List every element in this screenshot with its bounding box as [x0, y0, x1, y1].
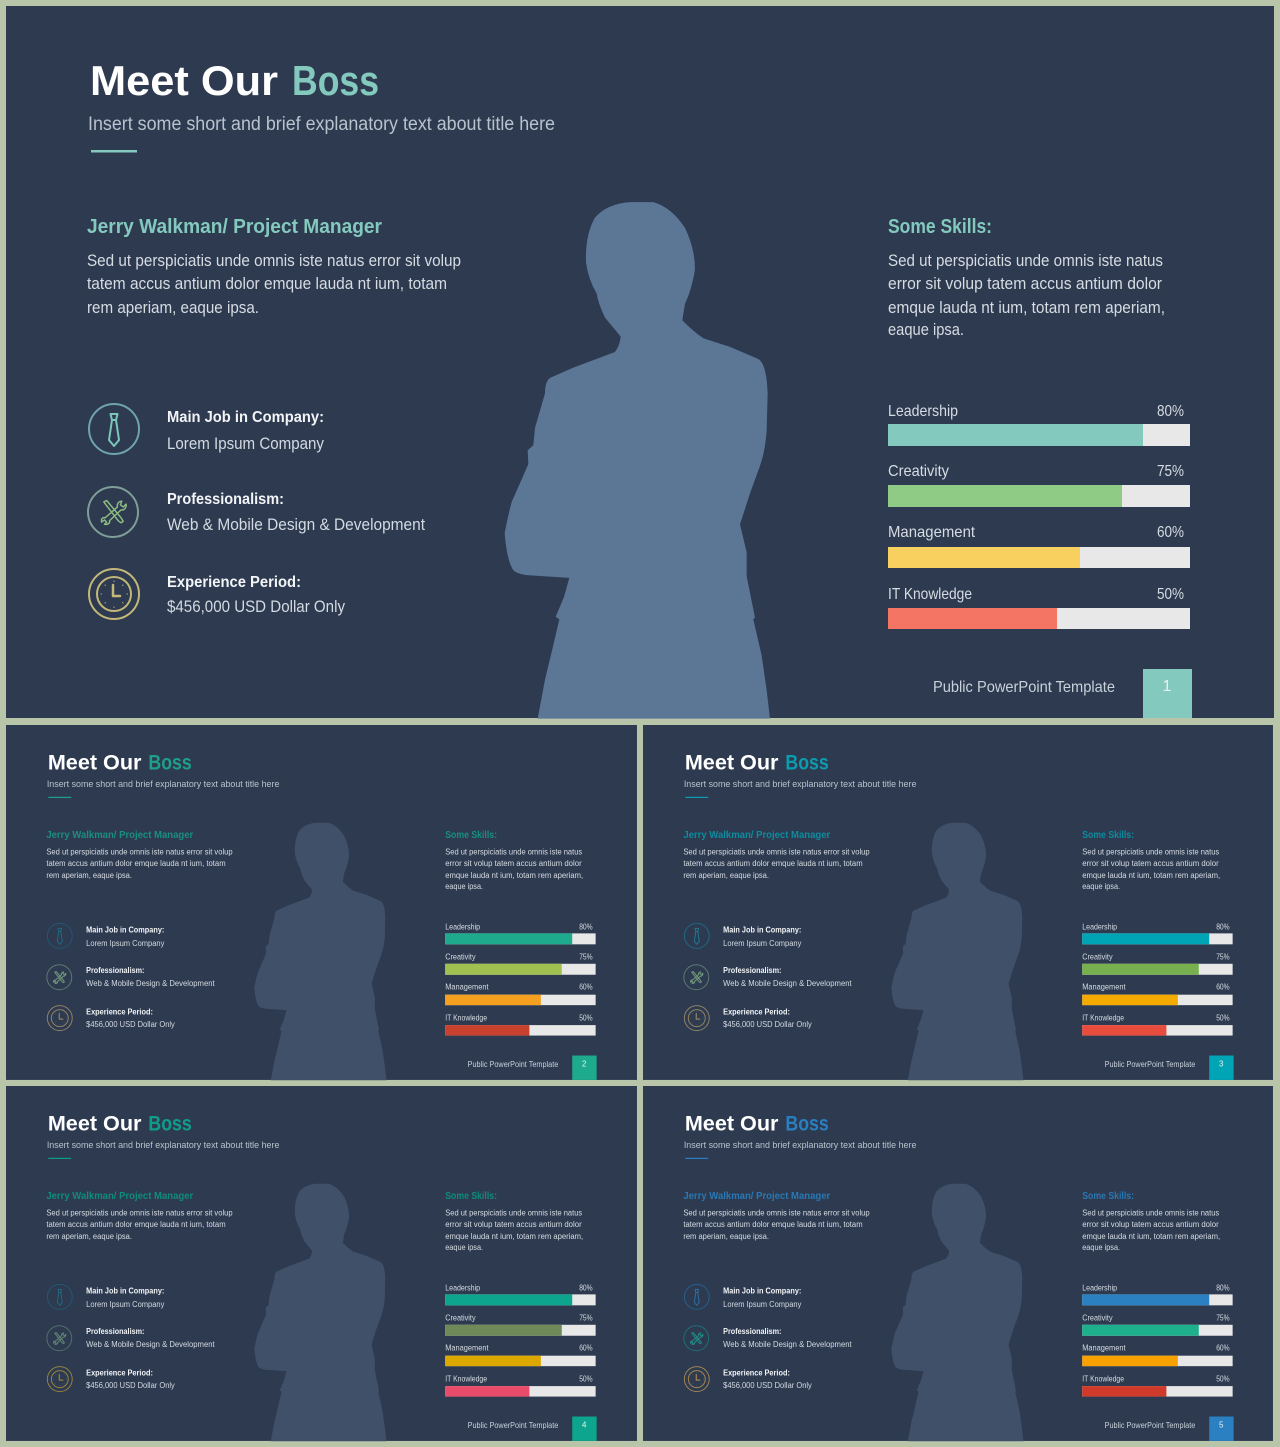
slide 1 professionalism text: Web & Mobile Design & Development	[167, 516, 425, 534]
slide 3 subtitle: Insert some short and brief explanatory text about title here	[684, 779, 916, 790]
slide 1 title underline	[91, 150, 137, 152]
slide 1 bar chart: skills: 50%	[1157, 586, 1184, 603]
slide 1 description: Sed ut perspiciatis unde omnis iste natus error sit volup	[87, 252, 461, 270]
slide 1 description: rem aperiam, eaque ipsa.	[87, 299, 259, 317]
slide 5 job text	[723, 1286, 802, 1309]
slide 1 page number	[1143, 669, 1192, 718]
slide 4 silhouette	[254, 1184, 386, 1441]
slide 5 name heading: Jerry Walkman/ Project Manager	[683, 1191, 830, 1202]
panel: slide 2	[6, 725, 637, 1080]
slide 1 job text: Main Job in Company:	[167, 409, 324, 426]
slide 4 skills description: emque lauda nt ium, totam rem aperiam,	[445, 1232, 583, 1241]
slide 4 title: Boss	[148, 1112, 192, 1135]
slide 2 bar chart: skills	[445, 922, 596, 1036]
slide 5 bar chart: skills: 75%	[1216, 1313, 1230, 1322]
slide 4 experience text: Experience Period:	[86, 1369, 153, 1378]
slide 5 icon: tools	[684, 1326, 709, 1351]
slide 2 description	[46, 848, 233, 880]
slide 2 skills description	[445, 848, 583, 891]
slide 5 title	[685, 1112, 829, 1135]
slide 2 skills description: Sed ut perspiciatis unde omnis iste natus	[445, 848, 582, 857]
slide 4 bar chart: skills	[445, 1283, 596, 1397]
slide 1 skills heading: Some Skills:	[888, 216, 992, 238]
slide 4 bar chart: skills: 80%	[579, 1283, 593, 1292]
slide 4 page number	[572, 1417, 597, 1441]
slide 4 footer text: Public PowerPoint Template	[468, 1421, 559, 1430]
slide 3 skills description: eaque ipsa.	[1082, 882, 1120, 891]
slide 4 icon: clock	[47, 1367, 72, 1392]
slide 2 description: tatem accus antium dolor emque lauda nt ium, totam	[46, 859, 226, 868]
slide 4 professionalism text: Web & Mobile Design & Development	[86, 1340, 215, 1349]
slide 4 title: Meet Our	[48, 1112, 141, 1135]
slide 3 background	[643, 725, 1273, 1080]
slide 3 silhouette	[891, 823, 1023, 1080]
slide 2 experience text: Experience Period:	[86, 1008, 153, 1017]
slide 3 title underline	[685, 797, 708, 798]
slide 5 bar chart: skills	[1082, 1283, 1233, 1397]
slide 3 page number	[1209, 1056, 1234, 1080]
slide 2 bar chart: skills: IT Knowledge	[445, 1014, 488, 1023]
panel: slide 3	[643, 725, 1273, 1080]
slide 3 bar chart: skills: 75%	[1216, 952, 1230, 961]
slide 4 job text: Main Job in Company:	[86, 1286, 164, 1295]
slide 4 description: Sed ut perspiciatis unde omnis iste natus error sit volup	[46, 1209, 233, 1218]
slide 5 experience text	[723, 1369, 813, 1390]
slide 2 title: Boss	[148, 751, 192, 774]
slide 3 bar chart: skills: 60%	[1216, 983, 1230, 992]
slide 1 bar chart: skills	[888, 403, 1190, 629]
slide 1 skills description	[888, 252, 1165, 339]
slide 4 icon: tools	[47, 1326, 72, 1351]
slide 3 name heading: Jerry Walkman/ Project Manager	[683, 830, 830, 841]
slide 1 job text: Lorem Ipsum Company	[167, 435, 325, 453]
slide 5 icon: clock	[684, 1367, 709, 1392]
slide 5 professionalism text: Web & Mobile Design & Development	[723, 1340, 852, 1349]
slide 5 title underline	[685, 1158, 708, 1159]
slide 1 skills description: error sit volup tatem accus antium dolor	[888, 275, 1162, 293]
slide 4 bar chart: skills: 75%	[579, 1313, 593, 1322]
panel: slide 5	[643, 1086, 1273, 1441]
slide 1 bar chart: skills: IT Knowledge	[888, 586, 972, 603]
slide 2 background	[6, 725, 637, 1080]
slide 5 bar chart: skills: Creativity	[1082, 1313, 1113, 1322]
slide 3 icon: clock	[684, 1006, 709, 1031]
slide 5 bar chart: skills: Management	[1082, 1344, 1126, 1353]
slide 2 footer text: Public PowerPoint Template	[468, 1060, 559, 1069]
slide 4 icon: tie	[47, 1284, 72, 1309]
slide 5 title: Meet Our	[685, 1112, 778, 1135]
slide 3 title	[685, 751, 829, 774]
slide 3 title: Meet Our	[685, 751, 778, 774]
slide 2 bar chart: skills: 80%	[579, 922, 593, 931]
slide 3 experience text	[723, 1008, 813, 1029]
slide 4 name heading: Jerry Walkman/ Project Manager	[46, 1191, 193, 1202]
slide 3 bar chart: skills: Creativity	[1082, 952, 1113, 961]
slide 2 professionalism text: Professionalism:	[86, 966, 144, 975]
slide 1 title: Boss	[292, 57, 379, 104]
slide 1 description	[87, 252, 461, 317]
slide 3 description: Sed ut perspiciatis unde omnis iste natus error sit volup	[683, 848, 870, 857]
slide 4 bar chart: skills: 50%	[579, 1375, 593, 1384]
slide 3 skills description: error sit volup tatem accus antium dolor	[1082, 859, 1219, 868]
slide 5 skills description: Sed ut perspiciatis unde omnis iste natus	[1082, 1209, 1219, 1218]
slide 2 description: rem aperiam, eaque ipsa.	[46, 871, 132, 880]
slide 1 footer text: Public PowerPoint Template	[933, 679, 1115, 696]
slide 2 name heading: Jerry Walkman/ Project Manager	[46, 830, 193, 841]
slide 5 description: Sed ut perspiciatis unde omnis iste natus error sit volup	[683, 1209, 870, 1218]
slide 2 bar chart: skills: 50%	[579, 1014, 593, 1023]
slide 2 page number: 2	[582, 1059, 587, 1068]
slide 5 skills description: emque lauda nt ium, totam rem aperiam,	[1082, 1232, 1220, 1241]
panel: slide 4	[6, 1086, 637, 1441]
slide 5 skills description: eaque ipsa.	[1082, 1243, 1120, 1252]
slide 5 skills description: error sit volup tatem accus antium dolor	[1082, 1220, 1219, 1229]
slide 2 job text: Main Job in Company:	[86, 925, 164, 934]
slide 1 name heading: Jerry Walkman/ Project Manager	[87, 216, 382, 238]
slide 4 description	[46, 1209, 233, 1241]
slide 1 icon: clock	[89, 569, 139, 619]
slide 5 professionalism text	[723, 1327, 852, 1349]
slide 5 description	[683, 1209, 870, 1241]
slide 3 job text: Lorem Ipsum Company	[723, 939, 802, 948]
slide 4 professionalism text	[86, 1327, 215, 1349]
slide 4 skills description: Sed ut perspiciatis unde omnis iste natus	[445, 1209, 582, 1218]
slide 3 experience text: $456,000 USD Dollar Only	[723, 1020, 813, 1029]
slide 2 bar chart: skills: Management	[445, 983, 489, 992]
slide 3 bar chart: skills: Management	[1082, 983, 1126, 992]
slide 3 icon: tie	[684, 923, 709, 948]
slide 3 professionalism text: Professionalism:	[723, 966, 781, 975]
slide 3 description: rem aperiam, eaque ipsa.	[683, 871, 769, 880]
slide 1 background	[6, 6, 1274, 718]
slide 1 bar chart: skills: 75%	[1157, 463, 1184, 480]
slide 1 skills description: emque lauda nt ium, totam rem aperiam,	[888, 299, 1165, 317]
slide 1 bar chart: skills: Management	[888, 524, 976, 541]
slide 3 skills description: Sed ut perspiciatis unde omnis iste natus	[1082, 848, 1219, 857]
slide 4 skills description: error sit volup tatem accus antium dolor	[445, 1220, 582, 1229]
slide 4 background	[6, 1086, 637, 1441]
slide 2 description: Sed ut perspiciatis unde omnis iste natus error sit volup	[46, 848, 233, 857]
slide 3 description	[683, 848, 870, 880]
slide 4 description: rem aperiam, eaque ipsa.	[46, 1232, 132, 1241]
slide 3 bar chart: skills: 50%	[1216, 1014, 1230, 1023]
slide 5 bar chart: skills: 60%	[1216, 1344, 1230, 1353]
slide 5 professionalism text: Professionalism:	[723, 1327, 781, 1336]
slide 2 job text	[86, 925, 165, 948]
slide 2 title	[48, 751, 192, 774]
slide 2 subtitle: Insert some short and brief explanatory text about title here	[47, 779, 279, 790]
slide 1 title	[90, 57, 379, 104]
slide 3 footer text: Public PowerPoint Template	[1105, 1060, 1196, 1069]
slide 4 description: tatem accus antium dolor emque lauda nt ium, totam	[46, 1220, 226, 1229]
slide 1 icon: tools	[88, 487, 138, 537]
slide 4 bar chart: skills: 60%	[579, 1344, 593, 1353]
slide 5 subtitle: Insert some short and brief explanatory text about title here	[684, 1140, 916, 1151]
slide 3 professionalism text: Web & Mobile Design & Development	[723, 979, 852, 988]
slide 5 bar chart: skills: 50%	[1216, 1375, 1230, 1384]
slide 5 silhouette	[891, 1184, 1023, 1441]
slide 1 professionalism text: Professionalism:	[167, 491, 284, 508]
slide 4 experience text: $456,000 USD Dollar Only	[86, 1381, 176, 1390]
slide 4 page number: 4	[582, 1420, 587, 1429]
slide 4 skills heading: Some Skills:	[445, 1191, 497, 1202]
slide 5 job text: Lorem Ipsum Company	[723, 1300, 802, 1309]
slide 3 bar chart: skills	[1082, 922, 1233, 1036]
slide 4 job text	[86, 1286, 165, 1309]
slide 2 bar chart: skills: 75%	[579, 952, 593, 961]
slide 2 job text: Lorem Ipsum Company	[86, 939, 165, 948]
slide 2 professionalism text: Web & Mobile Design & Development	[86, 979, 215, 988]
slide 1 skills description: eaque ipsa.	[888, 321, 964, 339]
slide 5 experience text: Experience Period:	[723, 1369, 790, 1378]
slide 3 skills heading: Some Skills:	[1082, 830, 1134, 841]
slide 1 description: tatem accus antium dolor emque lauda nt ium, totam	[87, 275, 447, 293]
slide 3 experience text: Experience Period:	[723, 1008, 790, 1017]
slide 5 page number	[1209, 1417, 1234, 1441]
slide 5 description: rem aperiam, eaque ipsa.	[683, 1232, 769, 1241]
slide 5 title: Boss	[785, 1112, 829, 1135]
slide 3 job text	[723, 925, 802, 948]
slide 3 page number: 3	[1219, 1059, 1224, 1068]
slide 5 footer text: Public PowerPoint Template	[1105, 1421, 1196, 1430]
slide 4 experience text	[86, 1369, 176, 1390]
slide 1 title: Meet Our	[90, 57, 278, 104]
slide 2 skills description: emque lauda nt ium, totam rem aperiam,	[445, 871, 583, 880]
slide 2 bar chart: skills: Leadership	[445, 922, 481, 931]
slide 4 bar chart: skills: Leadership	[445, 1283, 481, 1292]
slide 4 bar chart: skills: Creativity	[445, 1313, 476, 1322]
slide 5 background	[643, 1086, 1273, 1441]
slide 1 skills description: Sed ut perspiciatis unde omnis iste natus	[888, 252, 1163, 270]
slide 5 icon: tie	[684, 1284, 709, 1309]
slide 4 professionalism text: Professionalism:	[86, 1327, 144, 1336]
slide 3 bar chart: skills: Leadership	[1082, 922, 1118, 931]
slide 1 bar chart: skills: Creativity	[888, 463, 949, 480]
slide 3 skills description	[1082, 848, 1220, 891]
slide 3 title: Boss	[785, 751, 829, 774]
slide 4 title underline	[48, 1158, 71, 1159]
slide 2 bar chart: skills: Creativity	[445, 952, 476, 961]
slide 1 experience text: $456,000 USD Dollar Only	[167, 598, 346, 616]
slide 2 page number	[572, 1056, 597, 1080]
slide 1 icon: tie	[89, 404, 139, 454]
slide 5 experience text: $456,000 USD Dollar Only	[723, 1381, 813, 1390]
slide 5 bar chart: skills: IT Knowledge	[1082, 1375, 1125, 1384]
slide 2 experience text: $456,000 USD Dollar Only	[86, 1020, 176, 1029]
slide 2 icon: tools	[47, 965, 72, 990]
slide 4 bar chart: skills: IT Knowledge	[445, 1375, 488, 1384]
slide 3 bar chart: skills: IT Knowledge	[1082, 1014, 1125, 1023]
slide 1 silhouette	[505, 202, 770, 719]
slide 5 bar chart: skills: 80%	[1216, 1283, 1230, 1292]
slide 3 professionalism text	[723, 966, 852, 988]
slide 1 bar chart: skills: 60%	[1157, 524, 1184, 541]
slide 2 icon: clock	[47, 1006, 72, 1031]
slide 5 skills heading: Some Skills:	[1082, 1191, 1134, 1202]
slide 3 bar chart: skills: 80%	[1216, 922, 1230, 931]
slide 1 professionalism text	[167, 491, 425, 534]
slide 2 icon: tie	[47, 923, 72, 948]
slide 5 description: tatem accus antium dolor emque lauda nt ium, totam	[683, 1220, 863, 1229]
slide 1 subtitle: Insert some short and brief explanatory text about title here	[88, 114, 555, 135]
slide 2 title: Meet Our	[48, 751, 141, 774]
slide 5 job text: Main Job in Company:	[723, 1286, 801, 1295]
slide 1 experience text	[167, 574, 346, 616]
slide 3 description: tatem accus antium dolor emque lauda nt ium, totam	[683, 859, 863, 868]
slide 2 professionalism text	[86, 966, 215, 988]
slide 2 bar chart: skills: 60%	[579, 983, 593, 992]
slide 4 skills description	[445, 1209, 583, 1252]
slide 2 skills heading: Some Skills:	[445, 830, 497, 841]
slide 2 experience text	[86, 1008, 176, 1029]
slide 3 skills description: emque lauda nt ium, totam rem aperiam,	[1082, 871, 1220, 880]
slide 1 experience text: Experience Period:	[167, 574, 301, 591]
panel: main slide 1	[6, 6, 1274, 719]
slide 5 page number: 5	[1219, 1420, 1224, 1429]
slide 4 bar chart: skills: Management	[445, 1344, 489, 1353]
slide 1 bar chart: skills: 80%	[1157, 403, 1184, 420]
slide 4 title	[48, 1112, 192, 1135]
slide 4 subtitle: Insert some short and brief explanatory text about title here	[47, 1140, 279, 1151]
slide 3 icon: tools	[684, 965, 709, 990]
slide 5 skills description	[1082, 1209, 1220, 1252]
slide 1 job text	[167, 409, 325, 453]
slide 1 page number: 1	[1163, 678, 1172, 695]
slide 1 bar chart: skills: Leadership	[888, 403, 958, 420]
slide 4 skills description: eaque ipsa.	[445, 1243, 483, 1252]
slide 5 bar chart: skills: Leadership	[1082, 1283, 1118, 1292]
slide 2 silhouette	[254, 823, 386, 1080]
slide 2 skills description: error sit volup tatem accus antium dolor	[445, 859, 582, 868]
slide 2 skills description: eaque ipsa.	[445, 882, 483, 891]
slide 4 job text: Lorem Ipsum Company	[86, 1300, 165, 1309]
slide 3 job text: Main Job in Company:	[723, 925, 801, 934]
slide 2 title underline	[48, 797, 71, 798]
